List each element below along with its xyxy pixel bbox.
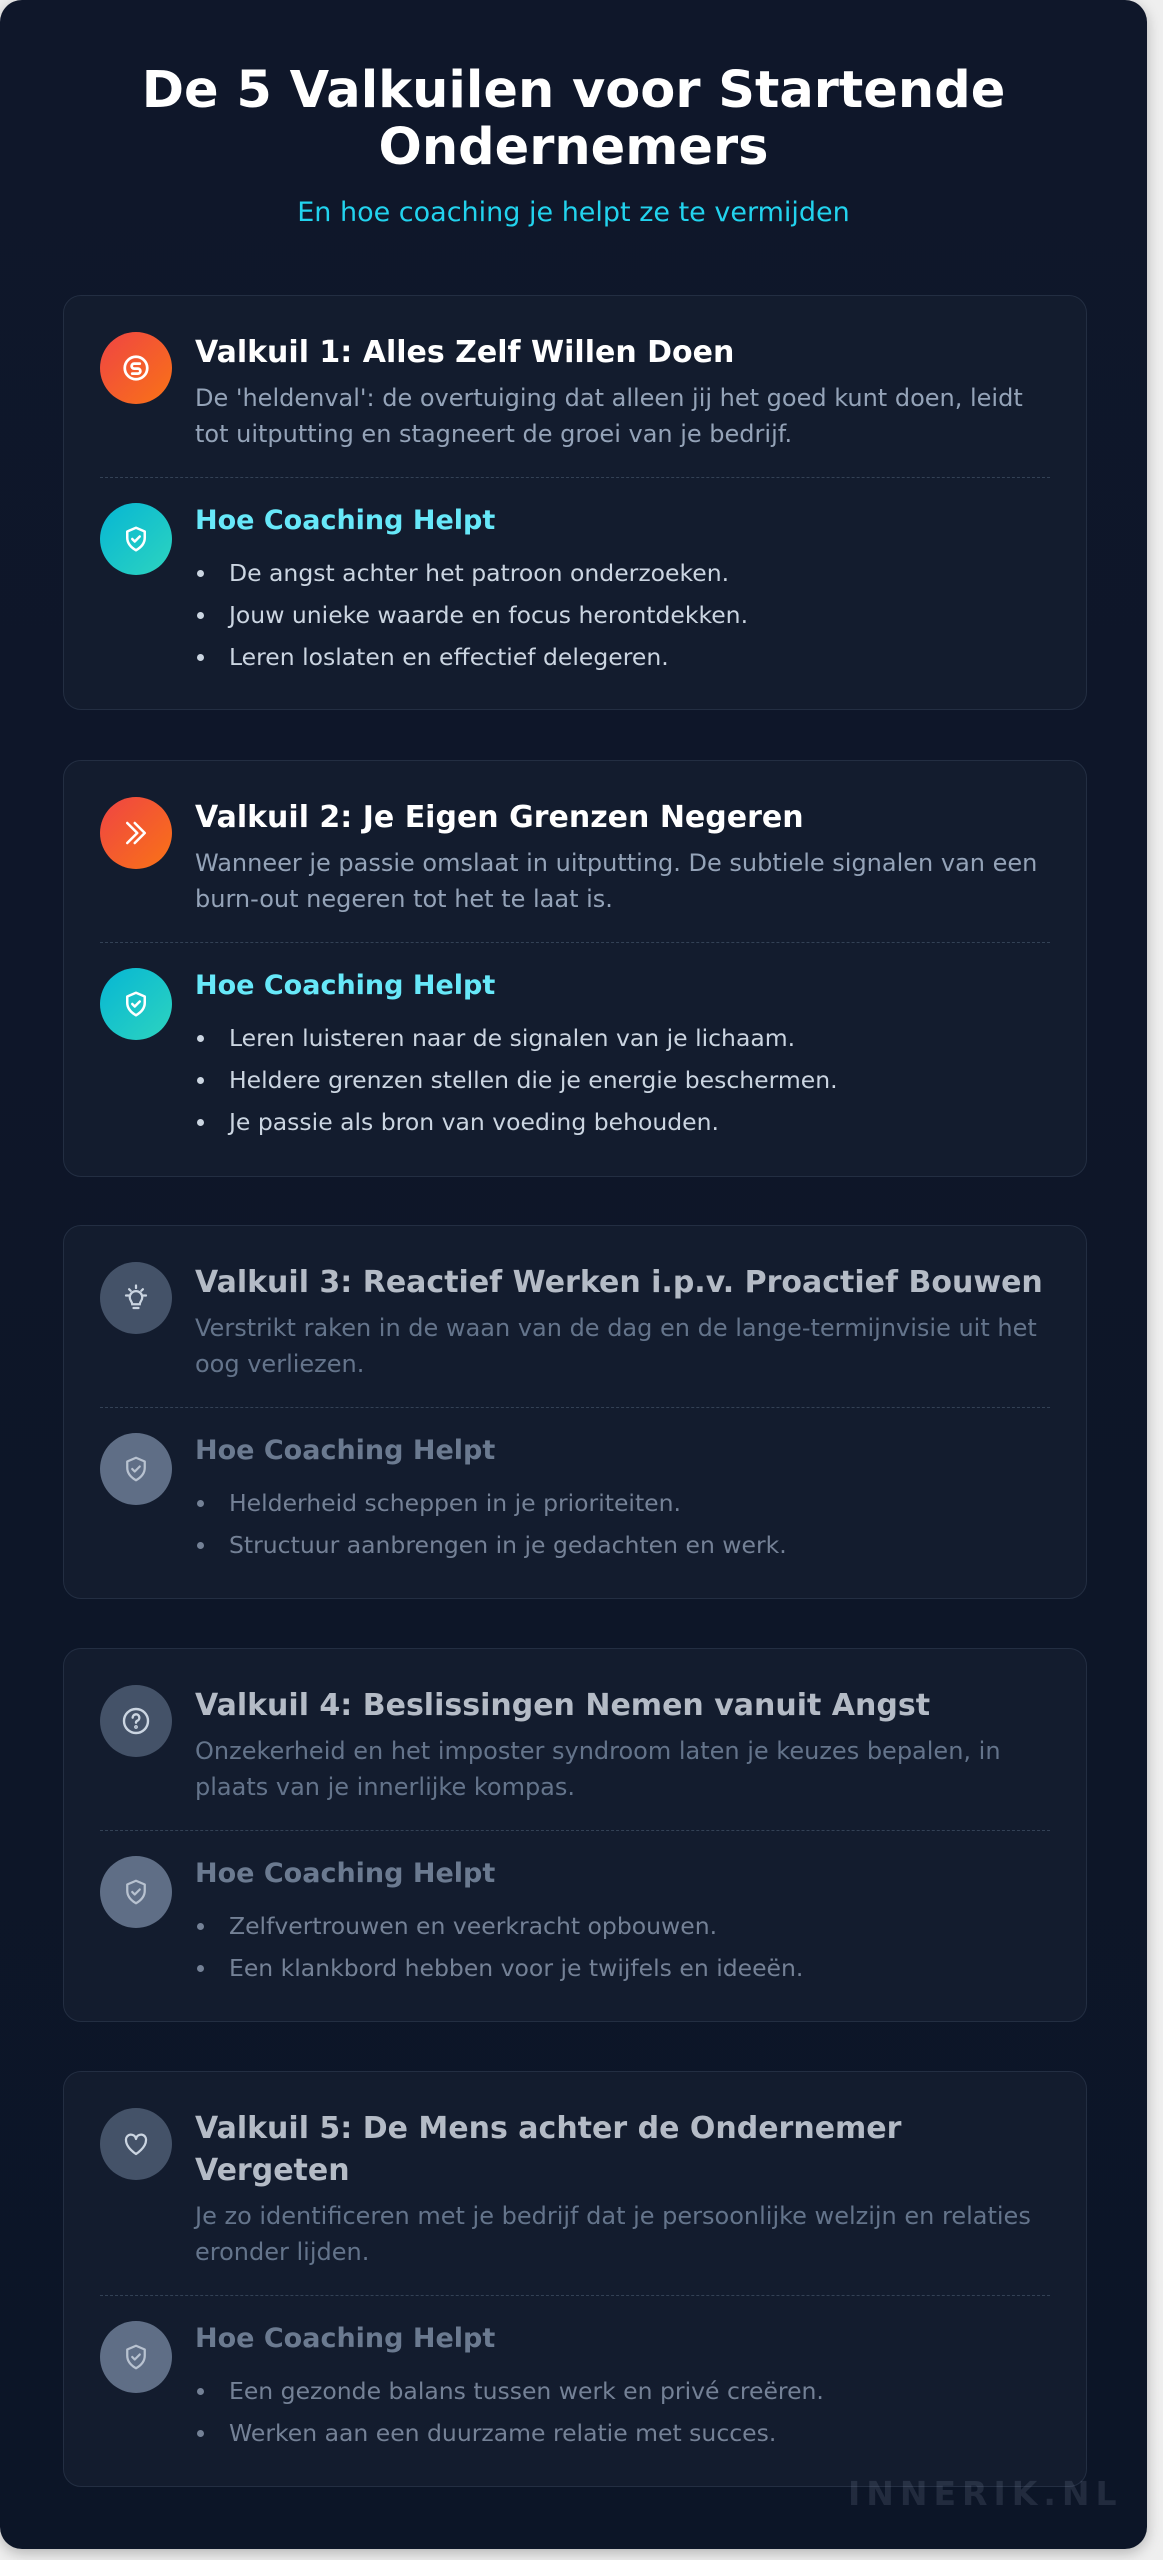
icon: question <box>100 1685 172 1757</box>
problem row 2: Wanneer je passie omslaat in uitputting. De subtiele signalen van een burn-out negeren tot het te laat is. <box>195 849 1037 913</box>
coaching row 1: De angst achter het patroon onderzoeken. <box>229 559 729 587</box>
title: Ondernemers <box>378 118 769 177</box>
coaching row 2 <box>100 968 838 1136</box>
title: De 5 Valkuilen voor Startende <box>142 61 1005 120</box>
problem row 5 <box>100 2108 1031 2266</box>
coaching row 4 <box>100 1856 803 1982</box>
coaching row 1: Jouw unieke waarde en focus herontdekken. <box>229 601 748 629</box>
subtitle: En hoe coaching je helpt ze te vermijden <box>297 197 850 228</box>
coaching row 2: Je passie als bron van voeding behouden. <box>229 1108 719 1136</box>
coaching row 4: Hoe Coaching Helpt <box>195 1858 495 1889</box>
coaching row 4: Een klankbord hebben voor je twijfels en ideeën. <box>229 1954 803 1982</box>
coaching row 5: Hoe Coaching Helpt <box>195 2323 495 2354</box>
icon: shield <box>100 503 172 575</box>
problem row 3 <box>100 1262 1043 1378</box>
coaching row 2: Leren luisteren naar de signalen van je lichaam. <box>229 1024 795 1052</box>
panel: valkuil 5 <box>63 2071 1087 2487</box>
icon: lightbulb <box>100 1262 172 1334</box>
problem row 1 <box>100 332 1023 448</box>
panel: valkuil 4 <box>63 1648 1087 2022</box>
watermark: INNERIK.NL <box>848 2474 1122 2513</box>
coaching row 3: Helderheid scheppen in je prioriteiten. <box>229 1489 681 1517</box>
icon: shield <box>100 968 172 1040</box>
panel: valkuil 3 <box>63 1225 1087 1599</box>
icon: heart <box>100 2108 172 2180</box>
icon: refresh coin <box>100 332 172 404</box>
problem row 2: Valkuil 2: Je Eigen Grenzen Negeren <box>195 800 804 835</box>
problem row 3: Valkuil 3: Reactief Werken i.p.v. Proactief Bouwen <box>195 1265 1043 1300</box>
coaching row 5: Werken aan een duurzame relatie met succes. <box>229 2419 776 2447</box>
panel: valkuil 1 <box>63 295 1087 710</box>
problem row 3: Verstrikt raken in de waan van de dag en de lange-termijnvisie uit het oog verliezen. <box>195 1314 1037 1378</box>
icon: double chevron <box>100 797 172 869</box>
icon: shield <box>100 2321 172 2393</box>
coaching row 3 <box>100 1433 787 1559</box>
problem row 4: Valkuil 4: Beslissingen Nemen vanuit Angst <box>195 1688 930 1723</box>
coaching row 1 <box>100 503 748 671</box>
coaching row 5: Een gezonde balans tussen werk en privé creëren. <box>229 2377 824 2405</box>
icon: shield <box>100 1433 172 1505</box>
problem row 4 <box>100 1685 1001 1801</box>
problem row 1: De 'heldenval': de overtuiging dat alleen jij het goed kunt doen, leidt tot uitputting en stagneert de groei van je bedrijf. <box>195 384 1023 448</box>
coaching row 1: Hoe Coaching Helpt <box>195 505 495 536</box>
problem row 2 <box>100 797 1037 913</box>
coaching row 3: Structuur aanbrengen in je gedachten en werk. <box>229 1531 787 1559</box>
problem row 1: Valkuil 1: Alles Zelf Willen Doen <box>195 335 734 370</box>
coaching row 2: Heldere grenzen stellen die je energie beschermen. <box>229 1066 838 1094</box>
icon: shield <box>100 1856 172 1928</box>
coaching row 4: Zelfvertrouwen en veerkracht opbouwen. <box>229 1912 717 1940</box>
problem row 5: Valkuil 5: De Mens achter de Ondernemer Vergeten <box>195 2111 901 2188</box>
problem row 5: Je zo identificeren met je bedrijf dat je persoonlijke welzijn en relaties eronder lijden. <box>195 2202 1031 2266</box>
coaching row 1: Leren loslaten en effectief delegeren. <box>229 643 669 671</box>
panel: valkuil 2 <box>63 760 1087 1177</box>
coaching row 2: Hoe Coaching Helpt <box>195 970 495 1001</box>
coaching row 3: Hoe Coaching Helpt <box>195 1435 495 1466</box>
title <box>142 61 1005 177</box>
coaching row 5 <box>100 2321 824 2447</box>
problem row 4: Onzekerheid en het imposter syndroom laten je keuzes bepalen, in plaats van je innerlijke kompas. <box>195 1737 1001 1801</box>
